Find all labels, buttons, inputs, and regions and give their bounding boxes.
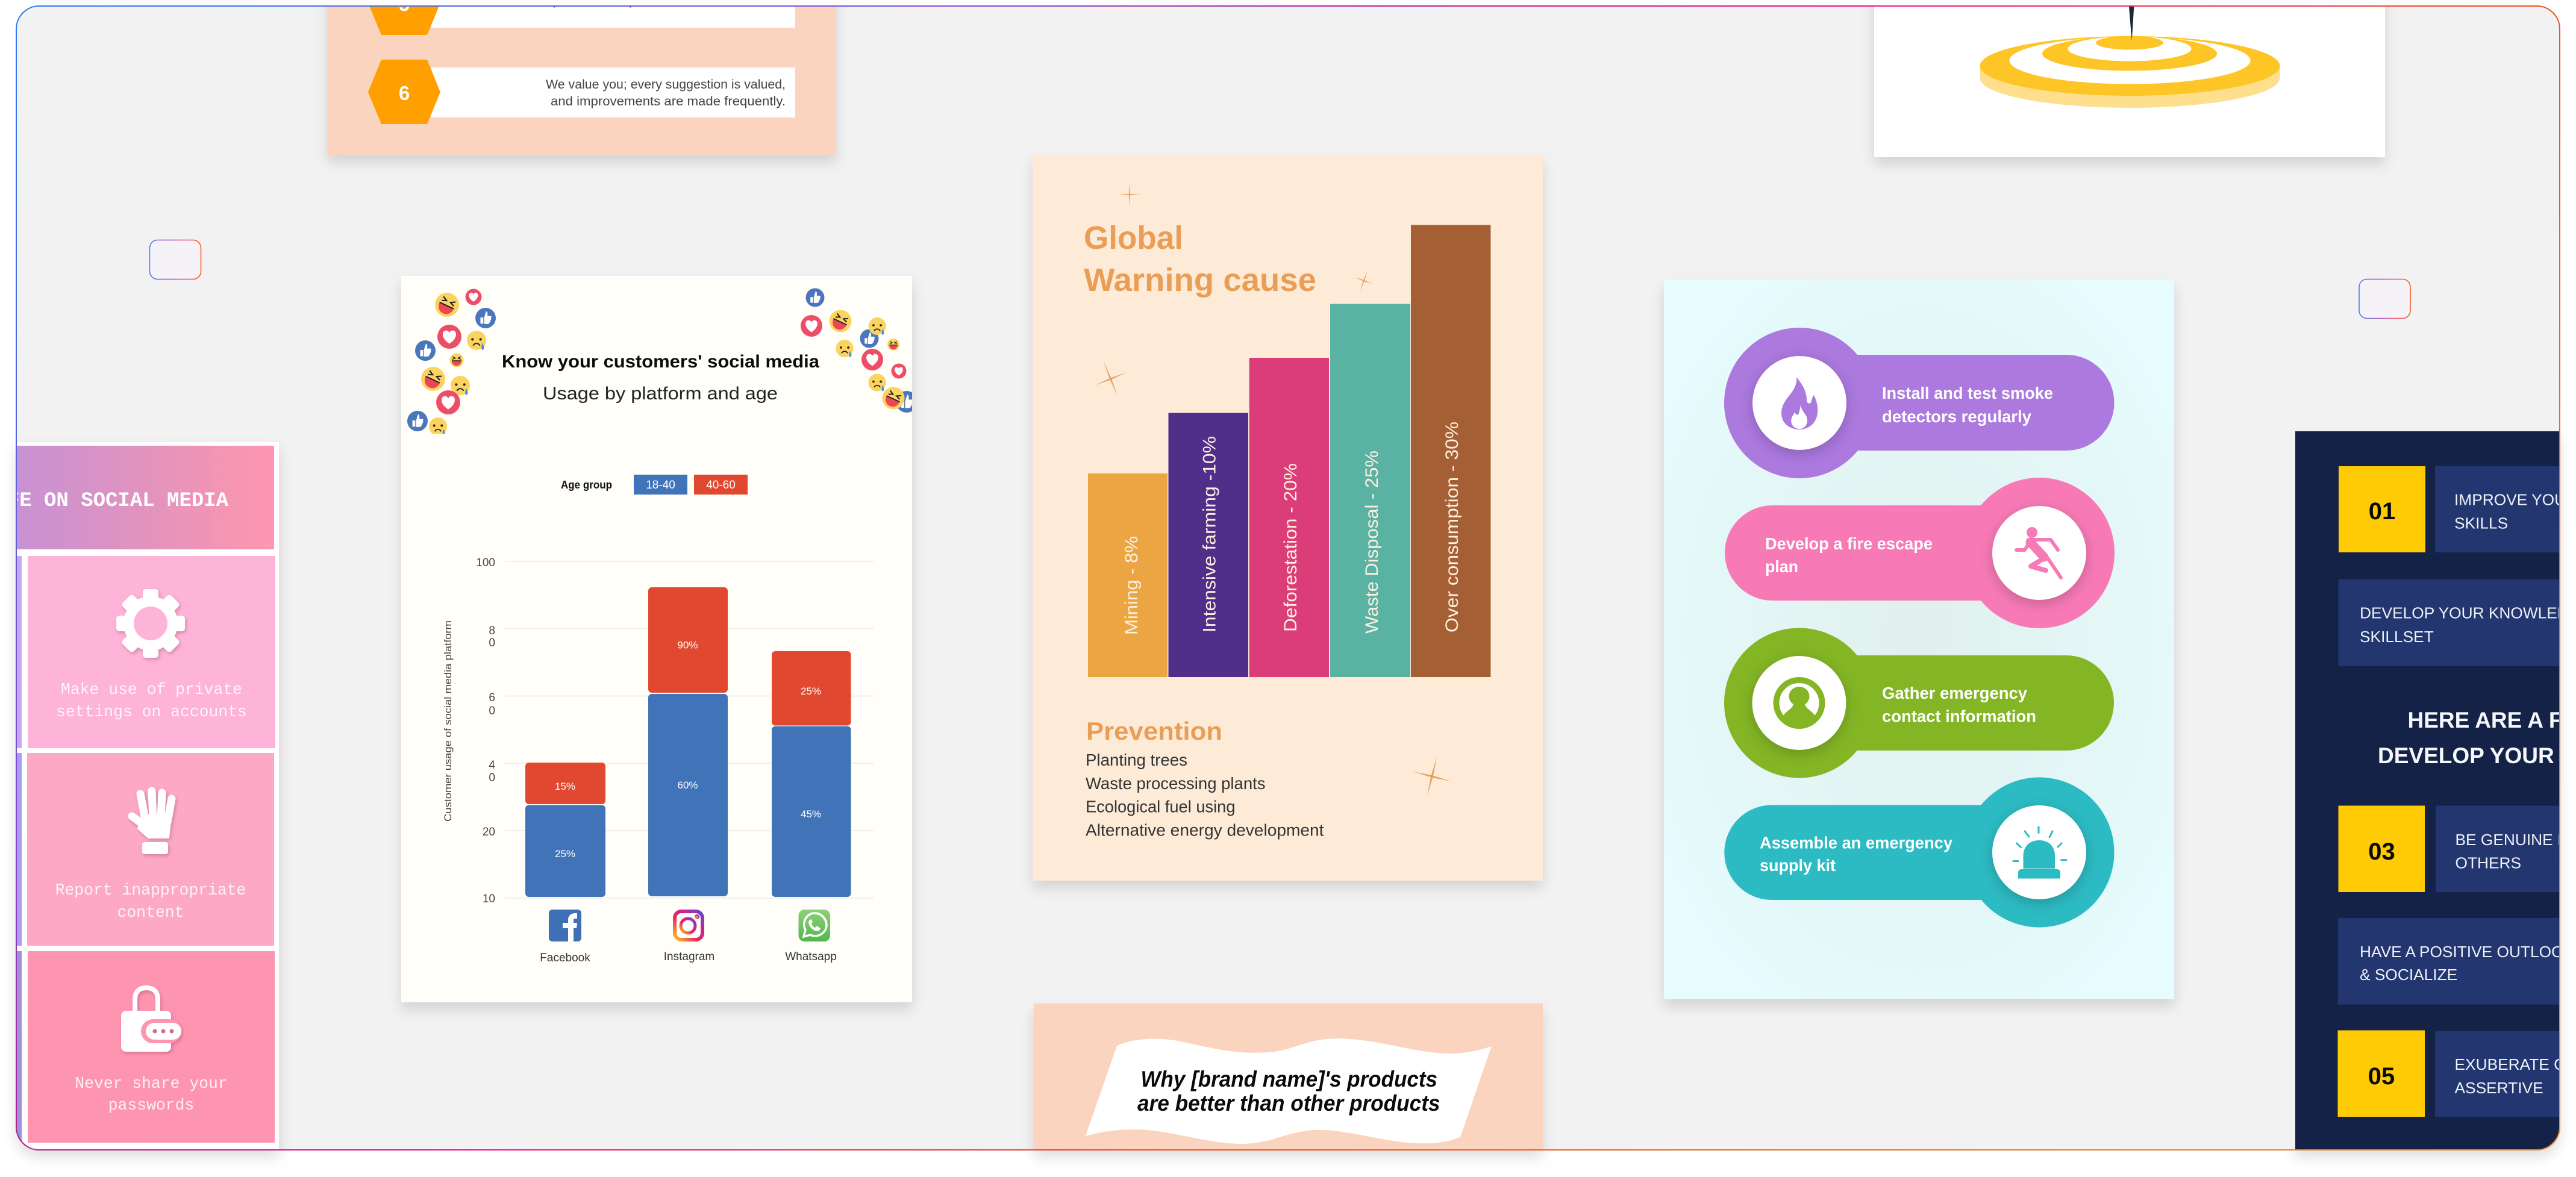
bar: deforestation	[1249, 358, 1329, 677]
item 01: 01	[2369, 498, 2395, 525]
item 04	[2338, 918, 2575, 1005]
heading: prevention: Prevention	[1086, 717, 1222, 745]
instagram bars: 60%	[677, 779, 698, 791]
tip 2: report content	[27, 753, 274, 946]
title	[1084, 220, 1316, 298]
banner text: Why [brand name]'s products	[1141, 1067, 1437, 1091]
icon: person in ring	[1776, 680, 1822, 726]
banner text	[1137, 1067, 1440, 1116]
step: fire escape plan	[1725, 478, 2115, 628]
y axis labels: 8	[489, 625, 495, 637]
step text	[1760, 834, 1952, 875]
panel: customer promises (top peach card)	[328, 0, 836, 155]
title: Global	[1084, 220, 1183, 256]
item 6 bar	[431, 67, 795, 117]
item 05: ASSERTIVE	[2454, 1079, 2543, 1097]
bar: over consumption: Over consumption - 30%	[1442, 422, 1462, 632]
panel: develop your social skills	[2295, 431, 2576, 1154]
y axis labels: 100	[476, 557, 495, 569]
item 6 text: and improvements are made frequently.	[551, 95, 786, 108]
tip 2 text	[55, 881, 246, 922]
tip 1 text: Make use of private	[61, 681, 242, 699]
icon: facebook	[549, 910, 581, 941]
title: Warning cause	[1084, 262, 1316, 298]
item 6 hexagon	[368, 60, 440, 124]
facebook bars: 15%	[555, 781, 575, 792]
small empty tag right	[2359, 279, 2410, 318]
legend: 18-40	[646, 479, 675, 492]
prevention list	[1086, 751, 1324, 840]
prevention list: Alternative energy development	[1086, 820, 1324, 840]
y axis labels: 0	[489, 705, 495, 717]
heading	[2378, 708, 2576, 768]
item 6 text: We value you; every suggestion is valued,	[546, 78, 786, 92]
y axis title: Customer usage of social media platform	[442, 620, 454, 822]
step text	[1882, 684, 2036, 725]
panel: know your customers' social media	[401, 276, 918, 1002]
icon: instagram	[675, 911, 702, 940]
item 01: IMPROVE YOUR	[2454, 490, 2576, 508]
platform labels	[540, 951, 837, 964]
whatsapp bars: 25%	[801, 685, 821, 697]
tip 3 text: Never share your	[75, 1075, 228, 1093]
prevention list: Planting trees	[1086, 751, 1187, 769]
stacked bar chart	[442, 557, 874, 905]
item 01: SKILLS	[2454, 514, 2508, 532]
bar chart: causes	[1088, 225, 1490, 677]
bar: intensive farming: Intensive farming -10%	[1200, 436, 1219, 632]
item 5 bar	[431, 7, 795, 28]
step text: detectors regularly	[1882, 407, 2031, 426]
bar: waste disposal	[1330, 304, 1410, 677]
step: emergency supply kit	[1724, 777, 2115, 928]
step text: Develop a fire escape	[1765, 534, 1933, 553]
item 04: HAVE A POSITIVE OUTLOOK	[2360, 943, 2575, 961]
wavy white banner	[1086, 1038, 1492, 1144]
item 01	[2339, 466, 2576, 552]
item 04: & SOCIALIZE	[2360, 966, 2457, 984]
y axis labels: 0	[489, 772, 495, 784]
tip 3 text	[75, 1075, 228, 1114]
item 03: 03	[2368, 838, 2395, 865]
icon: lock with password	[121, 988, 181, 1052]
item 03: OTHERS	[2456, 854, 2521, 872]
tip 1: private settings	[28, 556, 275, 748]
bar: deforestation: Deforestation - 20%	[1281, 463, 1301, 632]
item 6 number: 6	[399, 82, 410, 104]
whatsapp bars: 45%	[801, 808, 821, 820]
y axis labels: 10	[483, 893, 495, 905]
card shadows spilling outside the frame	[12, 431, 2566, 1154]
tip 1 text	[56, 681, 247, 721]
platform labels: Whatsapp	[785, 951, 837, 963]
step: emergency contacts	[1724, 628, 2114, 778]
prevention list: Waste processing plants	[1086, 774, 1265, 793]
icon: reaction emojis right	[801, 288, 918, 413]
step text: supply kit	[1760, 856, 1836, 875]
step text	[1882, 384, 2053, 426]
icon: reaction emojis left	[407, 289, 496, 436]
item 5 hexagon	[370, 7, 439, 35]
icon: sparkles	[1088, 183, 1456, 801]
step text: contact information	[1882, 707, 2036, 725]
tip 2 text: Report inappropriate	[55, 881, 246, 899]
instagram bars: 90%	[677, 640, 698, 651]
legend: Age group	[561, 479, 612, 491]
y axis labels: 6	[489, 692, 495, 704]
whatsapp bars	[772, 651, 851, 897]
y axis labels: 0	[489, 637, 495, 649]
icon: target with dart	[1980, 0, 2280, 108]
item 03: BE GENUINE IN	[2456, 831, 2573, 849]
bar: mining	[1088, 473, 1168, 677]
y axis labels	[476, 557, 495, 905]
step text: Gather emergency	[1882, 684, 2027, 702]
icon: gear	[116, 589, 185, 658]
tip 3: never share passwords	[28, 951, 275, 1143]
panel: global warming causes	[1033, 156, 1543, 881]
icon: flame	[1781, 377, 1818, 429]
step text: Assemble an emergency	[1760, 834, 1952, 852]
step: smoke detectors	[1724, 328, 2115, 478]
icon: alarm siren	[2013, 827, 2066, 878]
header band	[12, 446, 274, 549]
legend: 40-60	[706, 479, 736, 492]
panel: why brand products are better	[1034, 1004, 1543, 1154]
platform labels: Instagram	[664, 951, 714, 963]
icon: running person	[2016, 527, 2061, 578]
bar: intensive farming	[1169, 413, 1248, 677]
panel: target icon card	[1874, 0, 2385, 157]
step text	[1765, 534, 1933, 576]
tip 2 text: content	[117, 904, 184, 922]
prevention list: Ecological fuel using	[1086, 798, 1235, 816]
title: Know your customers' social media	[502, 352, 819, 372]
item 05: 05	[2368, 1063, 2395, 1090]
item 05	[2337, 1030, 2576, 1117]
item 03	[2339, 806, 2573, 892]
tip 1 text: settings on accounts	[56, 703, 247, 721]
small empty tag left	[149, 240, 201, 279]
bar: over consumption	[1411, 225, 1490, 677]
step text: Install and test smoke	[1882, 384, 2053, 402]
bar: mining: Mining - 8%	[1122, 536, 1142, 635]
instagram bars	[648, 587, 728, 896]
facebook bars: 25%	[555, 848, 575, 860]
platform labels: Facebook	[540, 952, 590, 964]
panel: safety on social media	[0, 442, 279, 1153]
banner text: are better than other products	[1137, 1091, 1440, 1116]
item 6 text	[546, 78, 786, 108]
item 02: SKILLSET	[2360, 628, 2434, 646]
legend	[561, 475, 748, 495]
step text: plan	[1765, 557, 1798, 576]
bar: waste disposal: Waste Disposal - 25%	[1362, 451, 1382, 634]
panel: fire safety steps	[1664, 279, 2174, 999]
icon: raised hand	[132, 791, 172, 854]
tip 3 text: passwords	[108, 1096, 194, 1114]
y axis labels: 20	[483, 826, 495, 838]
item 02	[2339, 579, 2576, 666]
left slivers	[17, 556, 22, 1141]
icon: whatsapp	[799, 910, 830, 941]
subtitle: Usage by platform and age	[543, 384, 778, 404]
y axis labels: 4	[489, 759, 495, 772]
facebook bars	[525, 763, 605, 897]
